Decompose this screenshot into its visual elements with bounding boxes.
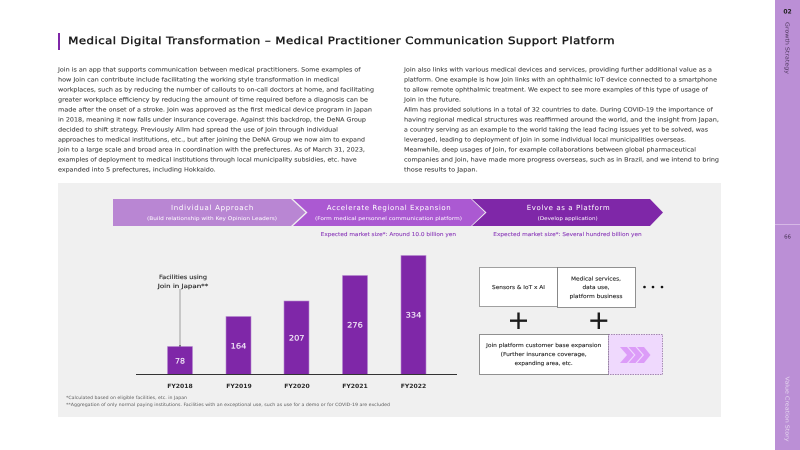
box: Medical services, data use, platform business: platform business (570, 293, 623, 300)
footnotes (66, 395, 390, 408)
callout: market size, regional expansion: Expected market size*: Around 10.0 billion yen (321, 231, 456, 238)
text block: left column: Join to a large scale and broad area in coordination with the prefectures. As of March 31, 2023, (57, 146, 365, 153)
bar: FY2018 (167, 346, 193, 390)
text block: right column: to allow remote ophthalmic treatment. We expect to see more examples of this type of usage of (404, 86, 709, 93)
text block: left column: greater workplace efficiency by reducing the amount of time required before a diagnosis can be (58, 96, 368, 103)
section label: Growth Strategy: Growth Strategy (784, 22, 790, 75)
ellipsis dots (643, 286, 663, 288)
title: Medical Digital Transformation – Medical Practitioner Communication Support Platform (68, 36, 615, 47)
page number: 66 (784, 234, 792, 240)
bar: FY2021 (342, 276, 368, 390)
arrow: Accelerate Regional Expansion: Accelerate Regional Expansion (327, 204, 451, 212)
text block: left column: workplaces, such as by reducing the number of callouts to on-call doctors at home, and facilitating (58, 86, 374, 93)
text block: left column: approaches to medical institutions, etc., but after joining the DeNA Group we now aim to expand (58, 136, 365, 143)
arrow: Accelerate Regional Expansion: (Form medical personnel communication platform) (315, 216, 462, 222)
arrow: Individual Approach (113, 199, 306, 226)
box: expansion arrows (608, 334, 662, 374)
box: Join platform customer base expansion: (Further insurance coverage, (501, 351, 587, 358)
chart annotation: facilities using Join in Japan: Join in Japan** (157, 283, 208, 290)
text block: left column: how Join can contribute include facilitating the working style transformation in medical (58, 76, 339, 83)
chart annotation: facilities using Join in Japan (157, 274, 208, 348)
icon: chevrons (620, 347, 650, 363)
icon: plus left (510, 312, 527, 329)
text block: right column: platform. One example is how Join links with an ophthalmic IoT device connected to a smartphone (404, 76, 717, 83)
box: Join platform customer base expansion (480, 334, 608, 374)
text block: right column: those results to Japan. (404, 166, 478, 173)
arrow: Evolve as a Platform: (Develop application) (538, 216, 598, 222)
bar: FY2018: FY2018 (167, 383, 193, 390)
section number: 02 (783, 8, 792, 16)
arrow: Individual Approach: (Build relationship with Key Opinion Leaders) (147, 216, 277, 222)
footnotes: **Aggregation of only normal paying institutions. Facilities with an exceptional use, such as use for a demo or for COVID-19 are excluded (66, 402, 390, 408)
text block: left column: made after the onset of a stroke. Join was approved as the first medical device program in Japan (58, 106, 372, 113)
text block: right column: having regional medical structures was reaffirmed around the world, and the insight from Japan, (404, 116, 719, 123)
bar: FY2022 (401, 256, 426, 390)
text block: right column: companies and Join, have made more progress overseas, such as in Brazil, and we intend to bring (404, 156, 719, 163)
arrow: Individual Approach: Individual Approach (171, 204, 253, 212)
text block: right column: Join also links with various medical devices and services, providing further additional value as a (403, 66, 712, 73)
bar: FY2022: FY2022 (401, 383, 426, 390)
bar chart: facilities using Join (136, 256, 457, 390)
box: Join platform customer base expansion: Join platform customer base expansion (485, 342, 601, 349)
arrow: Evolve as a Platform: Evolve as a Platform (527, 204, 610, 212)
text block: left column (57, 66, 374, 173)
icon: plus right (590, 312, 607, 329)
box: Medical services, data use, platform business: data use, (582, 284, 610, 291)
bar: FY2019: FY2019 (226, 383, 252, 390)
arrow: Accelerate Regional Expansion (293, 199, 485, 226)
footnotes: *Calculated based on eligible facilities, etc. in Japan (66, 395, 187, 401)
section label: Value Creation Story: Value Creation Story (784, 376, 790, 442)
text block: right column (403, 66, 719, 173)
box: Medical services, data use, platform business: Medical services, (571, 275, 621, 282)
text block: right column: a country serving as an example to the world taking the lead facing issues yet to be solved, was (404, 126, 708, 133)
text block: left column: decided to shift strategy. Previously Allm had spread the use of Join through individual (58, 126, 338, 133)
bar: FY2020: FY2020 (284, 383, 310, 390)
bar: FY2018: 78 (175, 357, 185, 366)
bar: FY2019 (226, 316, 252, 390)
text block: right column: Join in the future. (403, 96, 461, 103)
text block: left column: in 2018, meaning it now falls under insurance coverage. Against this backdrop, the DeNA Group (58, 116, 366, 123)
bar: FY2021: FY2021 (342, 383, 368, 390)
sidebar (775, 0, 800, 450)
callout: market size, platform: Expected market size*: Several hundred billion yen (493, 231, 642, 238)
box: Join platform customer base expansion: expanding area, etc. (515, 360, 573, 367)
text block: left column: Join is an app that supports communication between medical practitioners. Some examples of (57, 66, 362, 73)
chart annotation: facilities using Join in Japan: Facilities using (159, 274, 207, 281)
panel: diagram background (58, 183, 721, 417)
text block: right column: Meanwhile, deep usages of Join, for example collaborations between global pharmaceutical (404, 146, 696, 153)
arrow: Evolve as a Platform (472, 199, 663, 226)
box: Sensors and IoT x AI: Sensors & IoT x AI (492, 285, 545, 291)
text block: right column: leveraged, leading to deployment of Join in some individual local municipalities overseas. (404, 136, 686, 143)
text block: left column: expanded into 5 prefectures, including Hokkaido. (58, 166, 216, 173)
bar: FY2021: 276 (347, 321, 363, 330)
text block: left column: examples of deployment to medical institutions through local municipality subsidies, etc. have (58, 156, 357, 163)
box: Medical services, data use, platform business (558, 268, 636, 308)
bar: FY2019: 164 (231, 341, 247, 350)
bar: FY2022: 334 (406, 311, 422, 320)
bar: FY2020 (284, 301, 310, 390)
text block: right column: Allm has provided solutions in a total of 32 countries to date. During COVID-19 the importance of (404, 106, 714, 113)
bar: FY2020: 207 (289, 333, 305, 342)
box: Sensors and IoT x AI (480, 268, 558, 306)
